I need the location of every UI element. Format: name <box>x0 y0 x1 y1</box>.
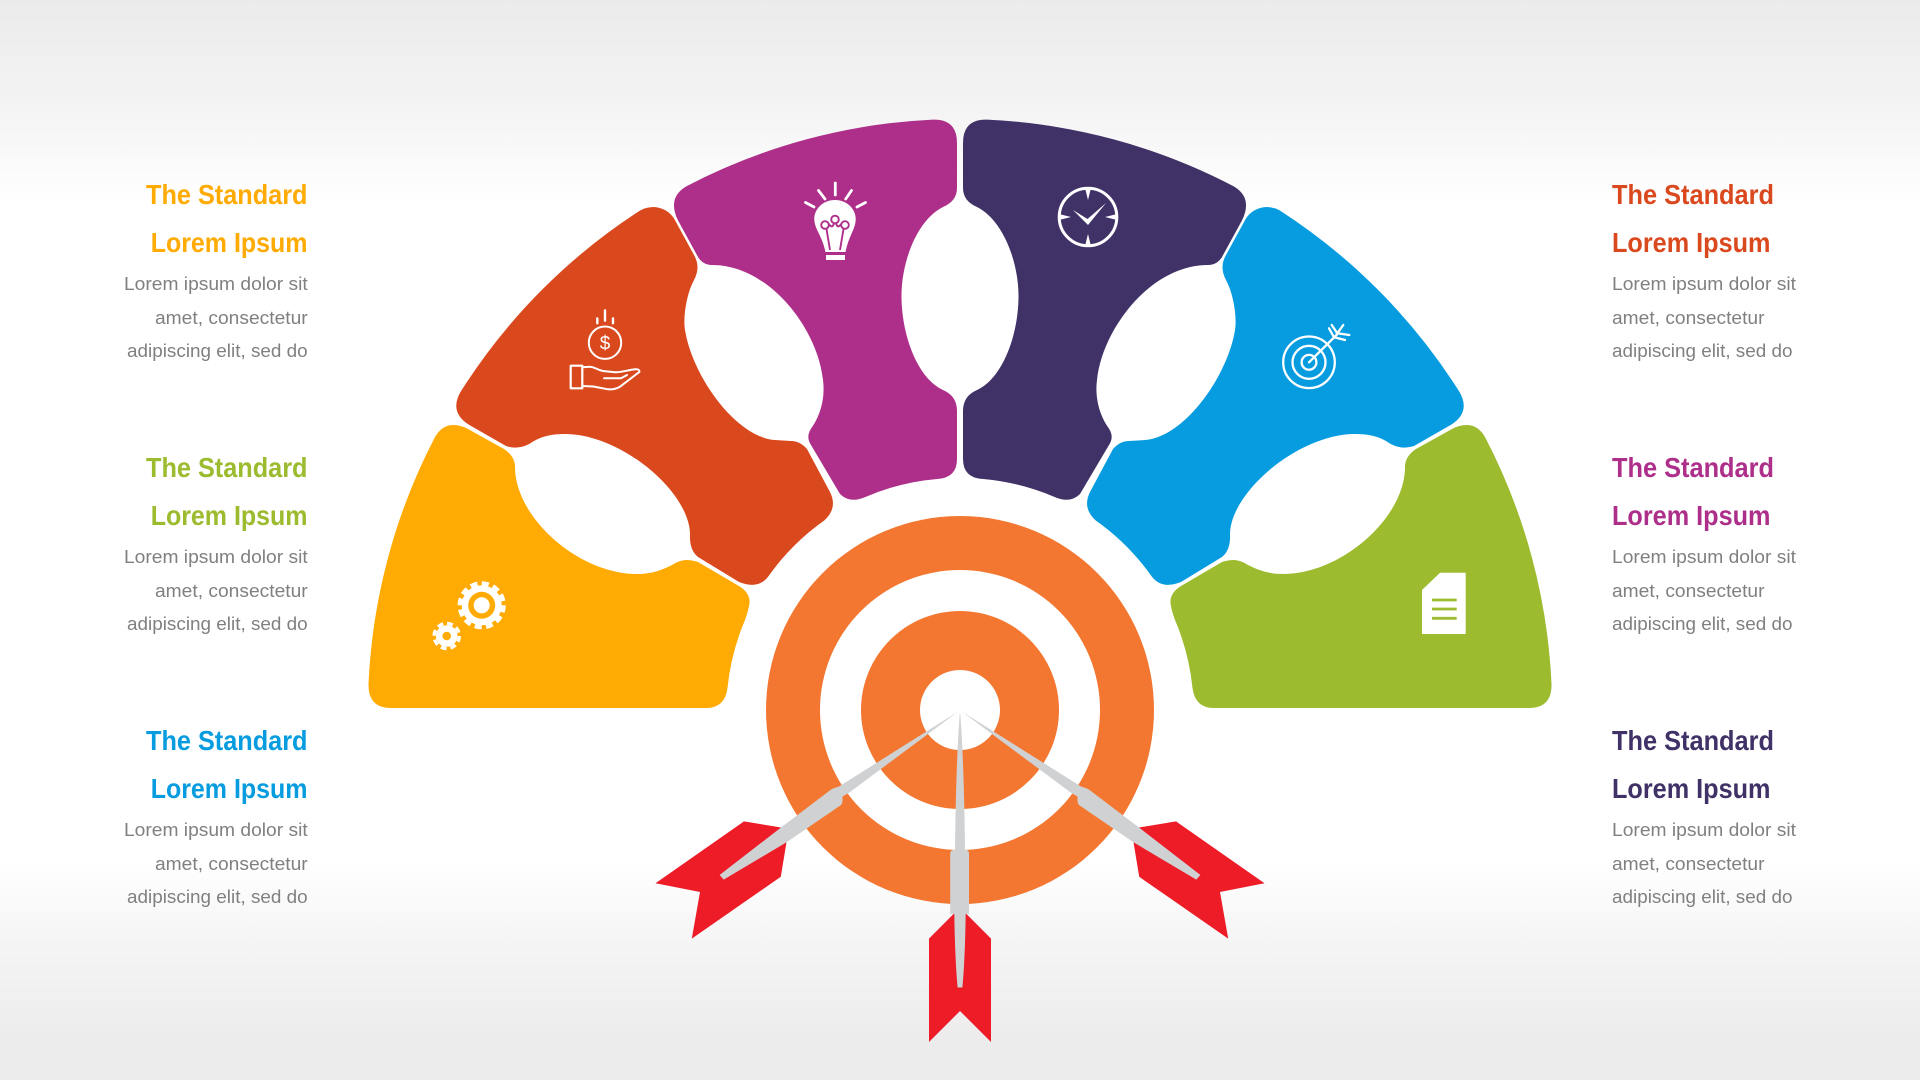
text block: left 1 yellow <box>124 179 309 361</box>
icon: clock <box>1059 188 1117 246</box>
text block: right 3 indigo: The Standard <box>1612 725 1774 756</box>
segment: indigo clock panel <box>963 120 1246 500</box>
text block: left 1 yellow: Lorem Ipsum <box>151 227 308 258</box>
text block: right 1 red-orange: Lorem Ipsum <box>1612 227 1770 258</box>
text block: right 3 indigo: Lorem ipsum dolor sit <box>1612 819 1797 840</box>
text block: right 2 purple: Lorem Ipsum <box>1612 500 1770 531</box>
text block: left 3 blue: adipiscing elit, sed do <box>127 886 308 907</box>
segment: green document panel <box>1170 425 1552 708</box>
text block: right 3 indigo: adipiscing elit, sed do <box>1612 886 1792 907</box>
icon: coin in hand: $ <box>600 334 611 354</box>
text block: right 2 purple <box>1612 452 1797 634</box>
text block: left 2 green <box>124 452 309 634</box>
text block: left 1 yellow: amet, consectetur <box>155 307 308 328</box>
text block: left 3 blue: Lorem Ipsum <box>151 773 308 804</box>
arrow: centre <box>929 711 991 1042</box>
text block: right 1 red-orange: The Standard <box>1612 179 1774 210</box>
icon: document <box>1422 573 1466 634</box>
icon: coin in hand <box>571 310 639 389</box>
text block: right 3 indigo: Lorem Ipsum <box>1612 773 1770 804</box>
target: concentric rings <box>766 516 1154 904</box>
segment: purple idea panel <box>674 120 957 500</box>
text block: left 2 green: adipiscing elit, sed do <box>127 613 308 634</box>
text block: left 3 blue: Lorem ipsum dolor sit <box>124 819 309 840</box>
arrow: left <box>656 711 958 939</box>
text block: right 2 purple: The Standard <box>1612 452 1774 483</box>
text block: left 3 blue: amet, consectetur <box>155 853 308 874</box>
segment: yellow gears panel <box>368 425 750 708</box>
text block: right 1 red-orange: amet, consectetur <box>1612 307 1764 328</box>
text block: left 2 green: Lorem Ipsum <box>151 500 308 531</box>
text block: left 1 yellow: Lorem ipsum dolor sit <box>124 273 309 294</box>
icon: light bulb <box>806 183 866 260</box>
icon: gears <box>434 584 504 649</box>
text block: right 2 purple: adipiscing elit, sed do <box>1612 613 1792 634</box>
arrow: right <box>962 711 1264 939</box>
text block: right 3 indigo <box>1612 725 1797 907</box>
text block: right 1 red-orange: Lorem ipsum dolor sit <box>1612 273 1797 294</box>
text block: left 3 blue <box>124 725 309 907</box>
text block: left 1 yellow: adipiscing elit, sed do <box>127 340 308 361</box>
text block: left 2 green: The Standard <box>146 452 308 483</box>
text block: left 2 green: amet, consectetur <box>155 580 308 601</box>
text block: right 2 purple: Lorem ipsum dolor sit <box>1612 546 1797 567</box>
segment: red-orange money panel <box>456 207 833 585</box>
text block: left 2 green: Lorem ipsum dolor sit <box>124 546 309 567</box>
text block: left 1 yellow: The Standard <box>146 179 308 210</box>
icon: target with arrow <box>1283 325 1349 388</box>
segment: blue target panel <box>1087 207 1464 585</box>
text block: right 2 purple: amet, consectetur <box>1612 580 1764 601</box>
text block: right 1 red-orange <box>1612 179 1797 361</box>
text block: right 1 red-orange: adipiscing elit, sed do <box>1612 340 1792 361</box>
text block: right 3 indigo: amet, consectetur <box>1612 853 1764 874</box>
text block: left 3 blue: The Standard <box>146 725 308 756</box>
